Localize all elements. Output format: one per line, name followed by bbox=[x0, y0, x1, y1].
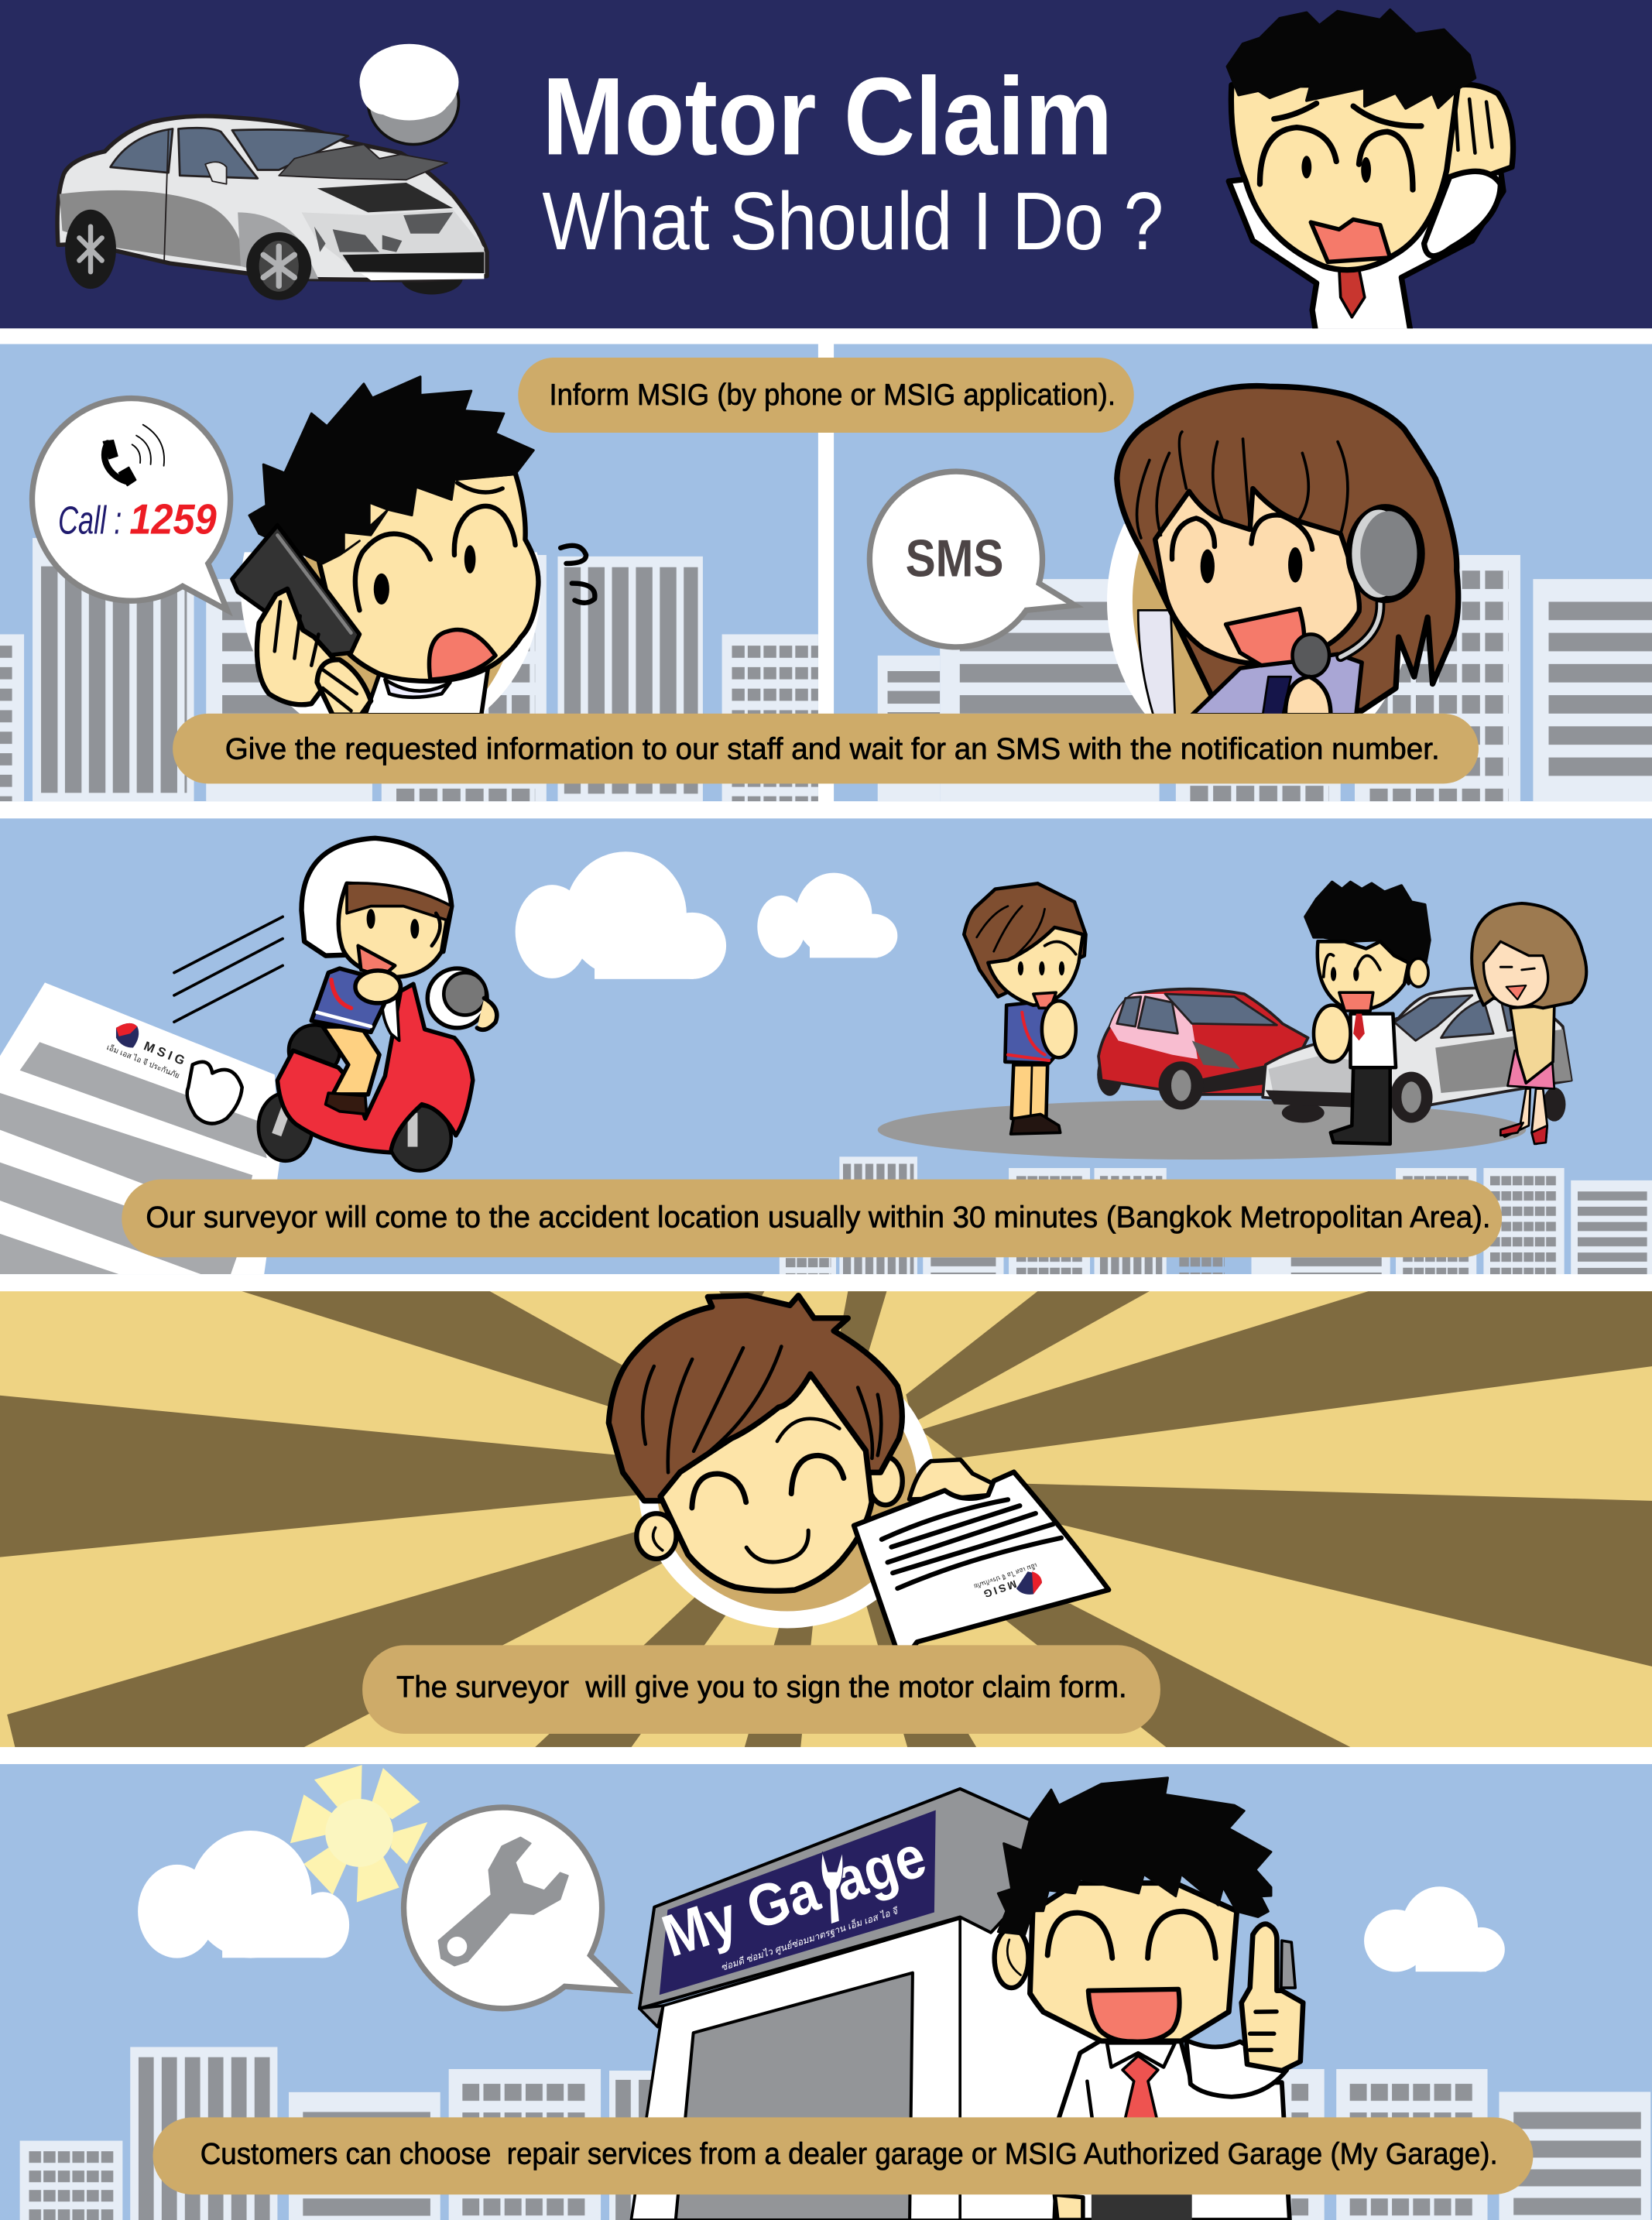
character: happy man thumbs up bbox=[995, 1778, 1303, 2220]
claim form paper: เอ็ม เอส ไอ จี ประกันภัย bbox=[973, 1561, 1038, 1591]
instruction pill: inform MSIG: Inform MSIG (by phone or MSIG application). bbox=[550, 378, 1116, 412]
cloud right bbox=[1364, 1886, 1505, 1972]
character: surveyor on red scooter bbox=[259, 838, 497, 1171]
character: man on phone bbox=[232, 377, 541, 746]
MSIG logo sign bbox=[105, 1023, 190, 1081]
icon: wrench letter bbox=[821, 1852, 843, 1924]
MSIG office building bbox=[0, 982, 280, 1274]
cloud left bbox=[138, 1831, 349, 1958]
character: smiling surveyor bbox=[608, 1296, 1109, 1663]
icon: phone and thumbs-up hand bbox=[1242, 1924, 1303, 2071]
instruction pill: surveyor arrival: Our surveyor will come to the accident location usually within 30 minutes (Bangkok Metropolitan Area). bbox=[146, 1200, 1491, 1234]
call label: Call : bbox=[58, 498, 122, 543]
garage sign: ซ่อมดี ซ่อมไว ศูนย์ซ่อมมาตรฐาน เอ็ม เอส ไอ จี bbox=[719, 1905, 900, 1974]
icon: hand bbox=[910, 1460, 994, 1499]
panel: step 1 left, caller bbox=[0, 344, 818, 801]
claim form paper bbox=[854, 1472, 1109, 1663]
character: customer man bbox=[1305, 882, 1430, 1144]
icon: telephone bbox=[103, 425, 164, 485]
icon: wrench bbox=[439, 1838, 568, 1965]
icon: red damaged car bbox=[1097, 989, 1308, 1109]
instruction pill: repair services: Customers can choose repair services from a dealer garage or MSIG Authorized Garage (My Garage). bbox=[201, 2137, 1498, 2171]
instruction pill: sign the form bbox=[362, 1645, 1160, 1734]
icon: smartphone bbox=[232, 526, 359, 656]
instruction pill: sign the form: The surveyor will give you to sign the motor claim form. bbox=[396, 1670, 1127, 1704]
icon: exhaust puff bbox=[187, 1062, 242, 1123]
panel: step 3 sign form bbox=[0, 1291, 1652, 1747]
My Garage building bbox=[631, 1789, 1104, 2220]
icon: headset bbox=[1293, 504, 1425, 677]
icon: sun bbox=[290, 1765, 427, 1903]
MSIG logo sign: เอ็ม เอส ไอ จี ประกันภัย bbox=[105, 1042, 181, 1081]
road shadow bbox=[878, 1100, 1526, 1160]
speech bubble: SMS: SMS bbox=[906, 529, 1003, 588]
MSIG logo sign: MSIG bbox=[142, 1039, 190, 1069]
character: customer woman bbox=[1472, 903, 1586, 1144]
icon: smoke puff bbox=[359, 44, 458, 145]
sunburst rays bbox=[0, 1291, 1652, 1747]
panel: header banner bbox=[0, 0, 1652, 337]
city buildings bbox=[20, 2047, 1650, 2220]
speech bubble: wrench bbox=[404, 1807, 626, 2009]
city buildings left bbox=[0, 538, 818, 801]
icon: speed lines bbox=[174, 916, 283, 1022]
title: Motor Claim bbox=[542, 55, 1112, 178]
city buildings right bbox=[878, 555, 1652, 801]
city buildings bbox=[780, 1156, 1652, 1276]
icon: crashed silver car bbox=[57, 116, 487, 300]
claim form paper: MSIG bbox=[980, 1578, 1018, 1601]
clouds bbox=[516, 851, 897, 979]
garage sign: My Garage bbox=[654, 1823, 934, 1970]
icon: silver damaged car bbox=[1263, 988, 1571, 1122]
speech bubble: SMS bbox=[869, 471, 1075, 647]
instruction pill: repair services bbox=[153, 2117, 1533, 2194]
panel: step 2 surveyor bbox=[0, 818, 1652, 1276]
car wheels bbox=[65, 210, 311, 300]
character: worried man bbox=[1227, 10, 1513, 337]
panel: step 4 garage bbox=[0, 1764, 1652, 2220]
instruction pill: requested information bbox=[173, 714, 1479, 783]
instruction pill: surveyor arrival bbox=[122, 1180, 1502, 1257]
instruction pill: inform MSIG bbox=[518, 358, 1134, 433]
character: operator with headset bbox=[1107, 386, 1458, 772]
icon: sweat marks bbox=[560, 546, 595, 603]
instruction pill: requested information: Give the requested information to our staff and wait for an SMS with the notification number. bbox=[225, 731, 1440, 766]
speech bubble: call 1259 bbox=[33, 399, 231, 610]
subtitle: What Should I Do ? bbox=[542, 176, 1164, 267]
panel: step 1 right, call centre bbox=[834, 344, 1652, 801]
character: surveyor greeting bbox=[964, 883, 1086, 1134]
phone number: 1259 bbox=[129, 495, 217, 543]
